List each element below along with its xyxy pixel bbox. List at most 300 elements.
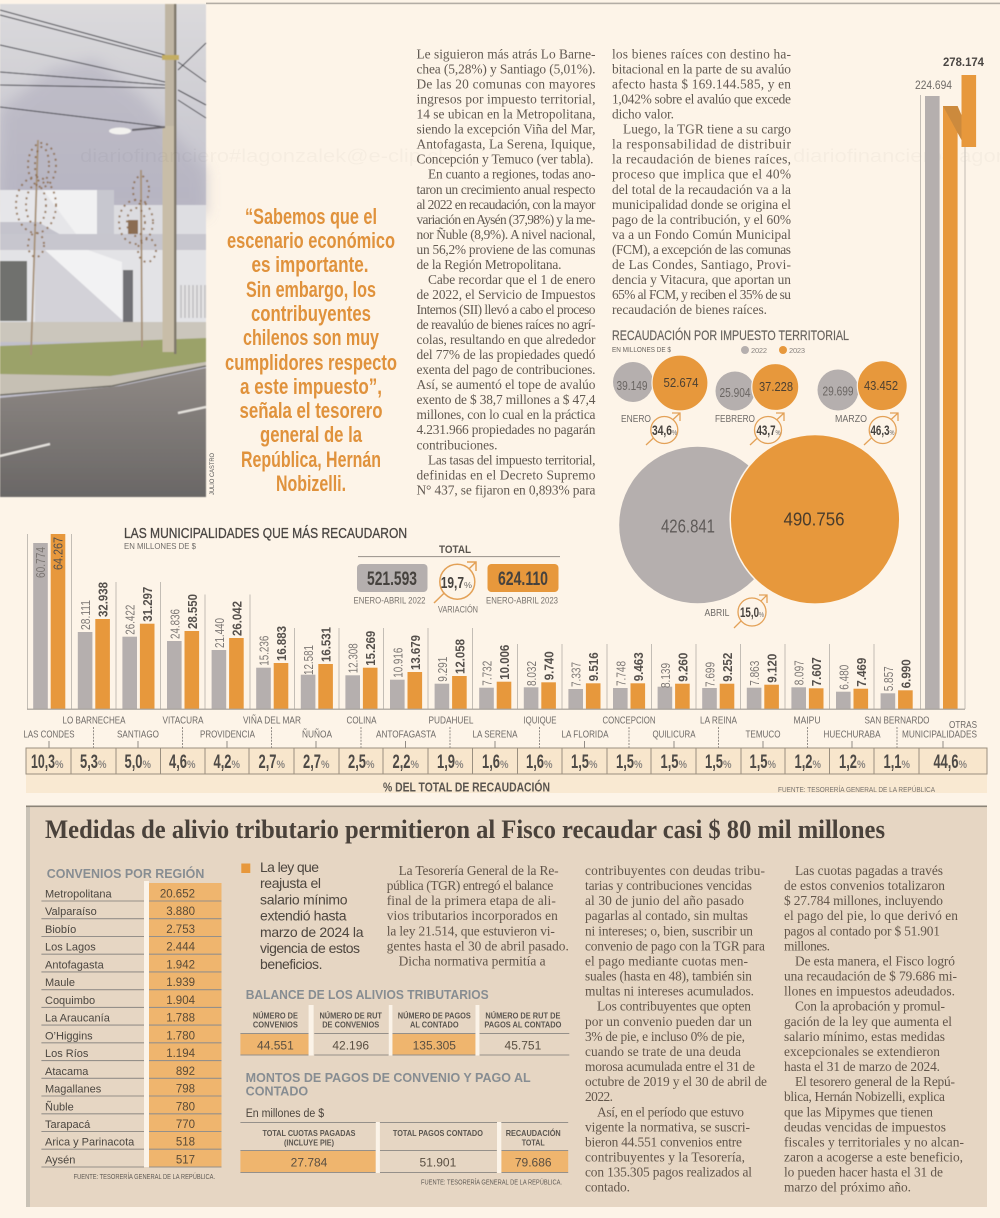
panel article column B: 3% de pie, e incluso 0% de pie, (585, 1029, 745, 1044)
panel article column B: cuando se trate de una deuda (585, 1044, 741, 1059)
pull quote: cumplidores respecto (225, 350, 397, 375)
article column 1: Las tasas del impuesto territorial, (428, 452, 596, 467)
bubbles: marzo: 46,3 (870, 423, 890, 438)
table: convenios por región: 780 (176, 1101, 195, 1113)
panel article column C: hasta el 31 de marzo de 2024. (784, 1059, 940, 1074)
panel article column C: gación de la ley que aumenta el (784, 1014, 952, 1029)
table: convenios por región: 770 (176, 1119, 195, 1131)
callout: la ley: marzo de 2024 la (260, 924, 364, 940)
percent of total table: 1,2 (794, 752, 812, 773)
table: convenios por región: 1.939 (166, 977, 195, 989)
article column 1: Cabe recordar que el 1 de enero (428, 272, 596, 287)
municipality labels with connectors: COLINA (346, 714, 376, 726)
article column 1: un 56,2% proviene de las comunas (416, 242, 596, 257)
municipality labels with connectors: OTRAS (949, 719, 977, 731)
article column 1: al 2022 en recaudación, con la mayor (416, 197, 596, 212)
total box (354, 544, 560, 616)
panel article column B: vigente la normativa, se suscri- (585, 1119, 750, 1134)
bars: Viña del Mar: 15.236 (258, 636, 272, 666)
municipality labels with connectors: LA SERENA (472, 728, 518, 740)
total 2022 (354, 564, 428, 606)
panel article column C: que las Mipymes que tienen (784, 1104, 933, 1119)
bars: San Bernardo: 6.990 (899, 659, 913, 688)
table: balance de los alivios: PAGOS AL CONTADO (484, 1020, 562, 1030)
table: convenios por región: 20.652 (160, 888, 195, 900)
municipality labels with connectors: MAIPU (794, 714, 820, 726)
bars: Temuco (747, 654, 780, 709)
bars: La Serena: 10.006 (498, 645, 512, 680)
panel article column C: blica, Hernán Nobizelli, explica (784, 1089, 945, 1104)
municipality labels with connectors (24, 714, 977, 748)
table: convenios por región: CONVENIOS POR REGIÓN (47, 866, 204, 881)
municipality labels with connectors: SANTIAGO (117, 728, 159, 740)
callout: la ley: vigencia de estos (260, 940, 360, 956)
bubble chart heading: EN MILLONES DE $ (612, 345, 672, 354)
table: convenios por región: 3.880 (166, 906, 195, 918)
bars: Ñuñoa: 12.581 (302, 645, 316, 675)
bubbles: abril: 490.756 (784, 510, 844, 530)
bars: La Reina: 7.699 (704, 662, 718, 687)
bar chart heading: LAS MUNICIPALIDADES QUE MÁS RECAUDARON (124, 525, 407, 542)
table: convenios por región: Atacama (45, 1066, 89, 1078)
table: convenios por región: O’Higgins (45, 1030, 93, 1042)
total 2023: ENERO-ABRIL 2023 (486, 596, 558, 606)
municipality labels with connectors: LA REINA (700, 714, 737, 726)
panel article column B: por un convenio pueden dar un (585, 1014, 752, 1029)
percent of total table: % (589, 759, 598, 771)
bars: Santiago: 31.297 (141, 587, 155, 622)
watermark (80, 146, 1000, 866)
bars: Otras municipalidades (tall, folded) (915, 55, 984, 709)
percent of total table: 5,0 (124, 752, 142, 773)
panel article column C: De esta manera, el Fisco logró (795, 954, 955, 968)
table: montos de pagos: (INCLUYE PIE) (284, 1138, 334, 1148)
municipality labels with connectors: CONCEPCION (602, 714, 656, 726)
panel article column B: contribuyentes con deudas tribu- (585, 863, 765, 878)
article column 1: del 77% de las propiedades quedó (416, 347, 596, 362)
panel article column C: salario mínimo, estas medidas (784, 1029, 945, 1044)
article column 2: la responsabilidad de distribuir (612, 137, 792, 152)
article column 2: va a un Fondo Común Municipal (612, 227, 791, 242)
panel article column C: Con la aprobación y promul- (795, 999, 945, 1014)
bubbles: febrero (715, 364, 799, 445)
bubbles: febrero: % (776, 430, 780, 437)
bars: Santiago (122, 587, 155, 709)
article column 1: Concepción y Temuco (ver tabla). (416, 152, 594, 167)
panel article column C: zaron a acogerse a este beneficio, (784, 1150, 963, 1164)
article column 1: Antofagasta, La Serena, Iquique, (416, 137, 596, 152)
panel article column B: suales (hasta en 48), también sin (585, 969, 752, 984)
panel article column B: multas ni intereses acumulados. (585, 984, 754, 999)
bars: Concepción: 7.748 (614, 661, 628, 686)
bars: Viña del Mar: 16.883 (275, 626, 289, 661)
bars: Quilicura: 8.139 (659, 663, 673, 688)
table: montos de pagos: TOTAL CUOTAS PAGADAS (262, 1128, 356, 1138)
bar chart: municipalities (27, 55, 984, 710)
table: montos de pagos: 79.686 (515, 1156, 552, 1170)
panel article column C: marzo del próximo año. (784, 1180, 911, 1195)
article column 1: nor Ñuble (8,9%). A nivel nacional, (416, 227, 596, 242)
bubbles: enero: ENERO (621, 413, 651, 425)
bars: Colina: 15.269 (364, 631, 378, 666)
percent of total table: 2,2 (392, 752, 410, 773)
panel article column B: con 135.305 pagos realizados al (585, 1165, 752, 1180)
bubbles: marzo (818, 361, 907, 445)
callout: la ley: beneficios. (260, 956, 322, 972)
panel article column A: La Tesorería General de la Re- (399, 863, 559, 878)
panel article column B: 2022. (585, 1089, 613, 1104)
watermark: diariofinanciero#lagonzalek@e-clip.cl (80, 146, 443, 166)
table: convenios por región: 892 (176, 1066, 195, 1078)
bubbles: febrero: 25.904 (720, 386, 751, 400)
bubbles: abril (619, 434, 900, 628)
photo credit: JULIO CASTRO (209, 453, 216, 495)
table: convenios por región: Arica y Parinacota (45, 1137, 135, 1149)
percent of total table: % DEL TOTAL DE RECAUDACIÓN (383, 780, 550, 794)
panel article column B: bieron 44.551 convenios entre (585, 1134, 742, 1149)
percent of total table: % (958, 759, 967, 771)
bars: Antofagasta: 10.916 (391, 648, 405, 678)
total variation: % (464, 581, 472, 590)
table: convenios por región: Ñuble (45, 1100, 74, 1113)
percent of total table: % (768, 759, 776, 771)
percent of total table: % (902, 759, 910, 771)
panel article column C: $ 27.784 millones, incluyendo (784, 893, 943, 908)
bars: Otras municipalidades (tall, folded): 278.174 (943, 55, 984, 69)
table: balance de los alivios: BALANCE DE LOS ALIVIOS TRIBUTARIOS (246, 988, 489, 1002)
bubble chart heading (612, 327, 849, 354)
article column 1: definidas en el Decreto Supremo (416, 467, 596, 482)
panel article column B: contado. (585, 1180, 630, 1195)
article column 1: exento de $ 38,7 millones a $ 47,4 (416, 392, 596, 407)
percent of total table: % (55, 759, 64, 771)
table: montos de pagos: RECAUDACIÓN (506, 1127, 561, 1138)
bubbles: marzo: % (890, 430, 894, 437)
article column 2: la recaudación de bienes raíces, (612, 152, 791, 167)
pull quote: contribuyentes (251, 301, 371, 326)
bars: Vitacura: 28.550 (186, 594, 200, 629)
bars: Antofagasta: 13.679 (409, 635, 423, 670)
article column 1: de 2022, el Servicio de Impuestos (416, 287, 596, 302)
table: convenios por región: Los Ríos (45, 1048, 89, 1060)
table: montos de pagos: 51.901 (420, 1156, 457, 1170)
table: convenios por región: 1.780 (166, 1030, 195, 1042)
percent of total table: 44,6 (934, 752, 958, 773)
panel article column A: la ley 21.514, que estuvieron vi- (387, 923, 555, 938)
bars: Ñuñoa: 16.531 (320, 627, 334, 662)
article column 2: municipalidad donde se origina el (612, 197, 791, 212)
table: convenios por región: Coquimbo (45, 995, 95, 1007)
pull quote (225, 204, 397, 496)
pull quote: señala el tesorero (240, 398, 382, 423)
table: convenios por región: Valparaíso (45, 906, 97, 918)
pull quote: Sin embargo, los (246, 277, 376, 302)
panel article column B: Los contribuyentes que opten (597, 999, 751, 1014)
bars: Temuco: 7.863 (748, 661, 762, 686)
municipality labels with connectors: LAS CONDES (24, 728, 74, 740)
panel article column C: el pago del pie, lo que derivó en (784, 908, 958, 923)
pull quote: a este impuesto”, (240, 374, 382, 399)
bars: San Bernardo (881, 659, 913, 709)
table: balance de los alivios: 45.751 (505, 1038, 542, 1052)
percent of total table: 4,2 (214, 752, 232, 773)
table: balance de los alivios: 135.305 (413, 1038, 456, 1052)
article column 2 (612, 46, 792, 317)
table: montos de pagos: MONTOS DE PAGOS DE CONVENIO Y PAGO AL (246, 1071, 531, 1085)
percent of total table: 2,7 (303, 752, 321, 773)
article column 2: dencia y Vitacura, que aportan un (612, 272, 791, 287)
panel article column C: El tesorero general de la Repú- (795, 1074, 955, 1089)
panel: medidas de alivio tributario (26, 806, 987, 1207)
bars: Maipú: 7.607 (810, 657, 824, 686)
table: balance de los alivios: CONVENIOS (253, 1020, 298, 1030)
bubbles: abril: ABRIL (704, 607, 730, 619)
panel article column C: millones. (784, 938, 830, 953)
bars: Colina: 12.308 (347, 643, 361, 673)
table: balance de los alivios (240, 988, 569, 1056)
percent of total table: % (366, 759, 375, 771)
percent of total table: 1,1 (884, 752, 902, 773)
total 2022: ENERO-ABRIL 2022 (354, 596, 426, 606)
municipality labels with connectors: PUDAHUEL (428, 714, 474, 726)
percent of total table: % (321, 759, 330, 771)
table: convenios por región: 798 (176, 1084, 195, 1096)
article column 1: De las 20 comunas con mayores (416, 77, 596, 92)
bubbles: marzo: 43.452 (864, 379, 898, 393)
percent of total table: 1,2 (839, 752, 857, 773)
article column 1: variación en Aysén (37,98%) y la me- (416, 212, 596, 227)
total variation: VARIACIÓN (438, 604, 478, 616)
percent of total table: % (857, 759, 866, 771)
panel article column B: pagarlas al contado, sin multas (585, 908, 748, 923)
table: convenios por región: 518 (176, 1137, 195, 1149)
bars: La Florida: 9.516 (587, 652, 601, 681)
table: balance de los alivios: NÚMERO DE PAGOS (398, 1009, 471, 1020)
article column 2: 1,042% sobre el avalúo que excede (612, 92, 791, 107)
municipality labels with connectors: IQUIQUE (524, 714, 556, 726)
callout: la ley: extendió hasta (260, 908, 347, 924)
bars: Las Condes: 60.774 (34, 547, 48, 578)
table: balance de los alivios: NÚMERO DE (253, 1009, 298, 1020)
article column 2: (FCM), a excepción de las comunas (612, 242, 791, 257)
bubbles: enero: 34,6 (652, 423, 672, 438)
article column 2: proceso que implica que el 40% (612, 167, 791, 182)
panel article column C: pagos al contado por $ 51.901 (784, 923, 940, 938)
table: convenios por región: FUENTE: TESORERÍA GENERAL DE LA REPÚBLICA. (74, 1172, 215, 1181)
percent of total table: % (678, 759, 687, 771)
article column 2: afecto hasta $ 169.144.585, y en (612, 77, 791, 92)
bubble legend: 2023 (789, 346, 805, 355)
bars: Concepción (613, 652, 646, 709)
table: convenios por región: 1.904 (166, 995, 196, 1007)
panel article column C: una recaudación de $ 79.686 mi- (784, 969, 957, 984)
article column 1: En cuanto a regiones, todas ano- (428, 167, 596, 182)
table: convenios por región: 2.444 (166, 942, 196, 954)
panel article column B: contribuyentes y la Tesorería, (585, 1150, 745, 1164)
panel article column C (784, 863, 964, 1195)
bars: Lo Barnechea: 28.111 (79, 600, 93, 630)
municipality labels with connectors: LO BARNECHEA (62, 714, 126, 726)
bars: Colina (345, 631, 378, 709)
municipality labels with connectors: TEMUCO (746, 728, 780, 740)
article column 1: contribuciones. (416, 437, 498, 452)
pull quote: “Sabemos que el (245, 204, 377, 229)
bars: Antofagasta (390, 635, 423, 709)
table: montos de pagos: FUENTE: TESORERÍA GENERAL DE LA REPÚBLICA. (421, 1178, 562, 1186)
bars: Maipú: 8.097 (793, 660, 807, 685)
table: balance de los alivios: AL CONTADO (410, 1020, 459, 1030)
bars: Providencia: 26.042 (230, 601, 244, 636)
municipality labels with connectors: ANTOFAGASTA (376, 728, 436, 740)
bars: Huechuraba: 6.480 (837, 665, 851, 690)
article column 2: pago de la contribución, y el 60% (612, 212, 791, 227)
percent of total table: 1,6 (482, 752, 500, 773)
municipality labels with connectors: SAN BERNARDO (864, 714, 930, 726)
article column 1: chea (5,28%) y Santiago (5,01%). (416, 62, 596, 76)
municipality labels with connectors: VITACURA (162, 714, 204, 726)
percent of total table (26, 748, 987, 794)
panel article column B: morosa acumulada entre el 31 de (585, 1059, 755, 1074)
table: convenios por región: La Araucanía (45, 1013, 111, 1025)
table: montos de pagos: TOTAL PAGOS CONTADO (393, 1128, 483, 1138)
bars: San Bernardo: 5.857 (882, 666, 896, 691)
table: montos de pagos: 27.784 (291, 1156, 328, 1170)
panel article column B: tarias y contribuciones vencidas (585, 878, 752, 893)
municipality labels with connectors: HUECHURABA (824, 728, 880, 740)
callout: la ley: reajusta el (260, 875, 321, 891)
panel article column A: Dicha normativa permitía a (399, 954, 546, 968)
bars: Vitacura (167, 594, 200, 709)
table: convenios por región: Magallanes (45, 1084, 102, 1096)
table: convenios por región: Tarapacá (45, 1119, 91, 1131)
percent of total table: 4,6 (169, 752, 187, 773)
table: convenios por región: Aysén (45, 1154, 75, 1166)
article column 1: Así, se aumentó el tope de avalúo (416, 377, 596, 392)
panel article column C: deudas vencidas de impuestos (784, 1119, 946, 1134)
table: convenios por región: Metropolitana (45, 888, 113, 900)
bubbles: abril: 426.841 (661, 516, 715, 536)
bars: Ñuñoa (301, 627, 334, 709)
bars: Pudahuel (435, 639, 467, 709)
article column 1: ingresos por impuesto territorial, (416, 92, 596, 107)
bars: Lo Barnechea: 32.938 (96, 582, 110, 617)
percent of total table: 1,5 (616, 752, 634, 773)
panel article column B: convenio de pago con la TGR para (585, 938, 765, 953)
watermark: diariofinanciero#lagonzalek@e-clip.cl (435, 846, 798, 866)
bars: La Serena: 7.732 (480, 661, 494, 686)
bubbles: abril: % (759, 612, 764, 619)
municipality labels with connectors: PROVIDENCIA (200, 728, 255, 740)
table: montos de pagos: TOTAL (522, 1138, 545, 1148)
percent of total table: % (142, 759, 151, 771)
article column 1: N° 437, se fijaron en 0,893% para (416, 482, 596, 497)
table: convenios por región: 2.753 (166, 924, 195, 936)
article column 1: Le siguieron más atrás Lo Barne- (416, 46, 596, 62)
bubbles: enero (613, 355, 708, 445)
panel article column B: Así, en el período que estuvo (597, 1104, 744, 1119)
table: montos de pagos (240, 1071, 568, 1186)
article column 2: bitacional en la parte de su avalúo (612, 62, 791, 76)
percent of total table: % (455, 759, 464, 771)
panel article column C: lo pueden hacer hasta el 31 de (784, 1165, 943, 1180)
percent of total table: 1,5 (705, 752, 723, 773)
percent of total table: 2,5 (348, 752, 366, 773)
article column 2: recaudación de bienes raíces. (612, 302, 767, 317)
callout: la ley (241, 859, 364, 972)
bubbles: enero: % (672, 430, 677, 437)
bubbles: enero: 39.149 (616, 379, 648, 393)
article column 2: los bienes raíces con destino ha- (612, 46, 791, 62)
table: convenios por región: Los Lagos (45, 942, 96, 954)
callout: la ley: salario mínimo (260, 891, 348, 907)
percent of total table: FUENTE: TESORERÍA GENERAL DE LA REPÚBLICA (778, 785, 935, 794)
total 2023 (486, 564, 558, 606)
panel heading: Medidas de alivio tributario permitieron al Fisco recaudar casi $ 80 mil millones (45, 815, 885, 844)
percent of total table: % (544, 759, 553, 771)
bars: Temuco: 9.120 (766, 654, 780, 683)
bars: Providencia: 21.440 (213, 618, 227, 648)
article column 1: de la Región Metropolitana. (416, 257, 562, 272)
table: balance de los alivios: 44.551 (257, 1038, 294, 1052)
percent of total table: 10,3 (31, 752, 55, 773)
article column 2: de Las Condes, Santiago, Provi- (612, 257, 791, 272)
percent of total table: 1,5 (571, 752, 589, 773)
panel article column A: vios tributarios incorporados en (387, 908, 558, 923)
bars: La Florida (568, 652, 601, 709)
percent of total table: % (500, 759, 509, 771)
table: montos de pagos: En millones de $ (246, 1108, 325, 1120)
bars: Iquique: 8.032 (525, 661, 539, 686)
table: balance de los alivios: NÚMERO DE RUT (319, 1009, 383, 1020)
bubbles: febrero: 43,7 (756, 423, 776, 438)
municipality labels with connectors: VIÑA DEL MAR (243, 714, 301, 726)
bars: Viña del Mar (256, 626, 289, 709)
bar chart heading: EN MILLONES DE $ (124, 541, 196, 551)
percent of total table: % (723, 759, 732, 771)
bars: La Reina: 9.252 (721, 653, 735, 682)
panel article column C: excepcionales se extendieron (784, 1044, 940, 1059)
percent of total table: 1,6 (526, 752, 544, 773)
bars: Quilicura: 9.260 (676, 653, 690, 682)
article column 1: colas, resultando en que alrededor (416, 332, 596, 347)
table: convenios por región: 517 (176, 1154, 195, 1166)
total 2023: 624.110 (498, 569, 548, 590)
bars: Iquique (524, 651, 557, 709)
bar chart heading (124, 525, 407, 551)
table: convenios por región: 1.194 (166, 1048, 196, 1060)
panel article column C: Las cuotas pagadas a través (795, 863, 943, 878)
article column 1: millones, con lo cual en la práctica (416, 407, 596, 422)
bars: Las Condes: 64.267 (52, 537, 66, 570)
percent of total table: 1,9 (437, 752, 455, 773)
article column 1: 14 se ubican en la Metropolitana, (416, 107, 596, 122)
panel article column B: ni intereses; o, bien, suscribir un (585, 923, 753, 938)
article column 1: siendo la excepción Viña del Mar, (416, 122, 596, 137)
municipality labels with connectors: LA FLORIDA (562, 728, 608, 740)
bars: Vitacura: 24.836 (168, 609, 182, 639)
article column 2: Luego, la TGR tiene a su cargo (623, 122, 791, 137)
table: balance de los alivios: 42.196 (332, 1038, 369, 1052)
bubbles: febrero: FEBRERO (715, 413, 755, 425)
article column 1: taron un crecimiento anual respecto (416, 182, 596, 197)
bubbles: marzo: MARZO (835, 413, 867, 425)
panel article column B: octubre de 2019 y el 30 de abril de (585, 1074, 767, 1089)
photo: street with houses and utility pole (0, 4, 206, 497)
percent of total table: 5,3 (80, 752, 98, 773)
panel article column A (387, 863, 569, 968)
percent of total table: 1,5 (750, 752, 768, 773)
bars: Maipú (791, 657, 824, 709)
